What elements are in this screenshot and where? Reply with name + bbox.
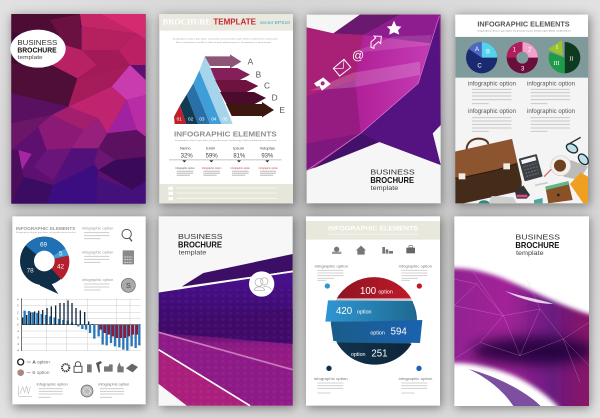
title: BUSINESS xyxy=(515,232,560,241)
text blocks: infographic options: infographic option xyxy=(468,82,516,88)
chart: segmented circle: option xyxy=(370,331,385,337)
dots xyxy=(325,283,422,371)
chart: pyramid arrows A-E: B xyxy=(256,69,262,79)
intro text: Nunc suspendisse convallis ut tellus at porta pellentesque leo. Suspendisse at tortor laoreet xyxy=(176,41,272,44)
stats row: 32% xyxy=(181,153,193,159)
icon: at sign: @ xyxy=(352,48,364,62)
chart: segmented circle: 100 xyxy=(360,286,376,297)
chart: pie ABC xyxy=(466,42,497,73)
panel: pyramid brochure: Suspendisse ultrices quis dolor, vel gravida mauris facilisis eget. Morbi condimentum malesuada xyxy=(175,139,277,142)
icon: globe xyxy=(81,385,93,397)
chart: bars: 3 xyxy=(17,304,19,308)
text blocks: lower options: infographic option xyxy=(37,383,68,387)
chart: pyramid arrows A-E: 02 xyxy=(188,117,194,122)
heading: INFOGRAPHIC ELEMENTS xyxy=(477,21,570,28)
text blocks: infographic options xyxy=(468,82,575,131)
chart: pyramid arrows A-E: 03 xyxy=(199,117,205,122)
text blocks: options with icons: infographic option xyxy=(82,250,113,254)
chart: bars: -1 xyxy=(17,329,20,333)
icon: magnifier xyxy=(122,229,132,241)
chart: segmented circle: option xyxy=(357,309,372,315)
heading: brochure template: vector EPS10 xyxy=(260,20,290,26)
title blob: business brochure: BUSINESS xyxy=(17,40,58,47)
title: business brochure: template xyxy=(371,186,399,192)
stats row: Voluptas xyxy=(260,146,275,151)
illustration: briefcase xyxy=(455,139,522,203)
icon row xyxy=(62,361,138,372)
panel: wave cover xyxy=(447,216,597,412)
chart: pie I II III xyxy=(548,40,580,73)
text blocks: infographic option xyxy=(399,264,432,268)
chart: donut speech bubble: 78 xyxy=(27,267,34,274)
chart: pyramid arrows A-E: 04 xyxy=(211,117,217,122)
icon: star xyxy=(387,21,401,35)
icon: people circle xyxy=(249,271,274,297)
chart: segmented circle: option xyxy=(351,352,366,358)
title: business brochure: BROCHURE xyxy=(370,175,414,185)
title: template xyxy=(179,251,207,257)
icon: chart thumbnail xyxy=(19,386,32,396)
title: BROCHURE xyxy=(178,240,222,250)
chart: segmented circle: 420 xyxy=(336,306,352,317)
panel: purple arrow cover xyxy=(307,15,441,203)
heading: brochure template: BROCHURE xyxy=(163,18,211,27)
panel: pyramid brochure xyxy=(159,14,293,203)
chart: donut speech bubble: 69 xyxy=(40,241,48,248)
stats row: 59% xyxy=(206,153,218,159)
chart: pyramid arrows A-E: A xyxy=(248,57,254,67)
panel: brochure cover polygon xyxy=(11,14,146,204)
panel: circle segment infographic xyxy=(306,216,440,406)
title blob: business brochure: template xyxy=(18,55,43,61)
intro text xyxy=(173,37,278,44)
text blocks: infographic options: infographic option xyxy=(527,82,575,88)
icon: calculator xyxy=(123,250,134,264)
stats row: 93% xyxy=(261,153,274,159)
chart: segmented circle: option xyxy=(378,289,393,295)
text blocks: infographic option xyxy=(399,377,432,381)
option columns: Infographic option xyxy=(202,167,222,170)
heading: Suspendisse ultrices quis dolor, vel gravida mauris facilisis xyxy=(16,231,76,234)
chart: bars: 4 xyxy=(17,297,19,301)
option columns xyxy=(175,167,279,175)
chart: pyramid arrows A-E: 05 xyxy=(222,117,228,122)
chart: pyramid arrows A-E: D xyxy=(272,92,278,102)
chart: segmented circle xyxy=(325,277,422,365)
chart: pie I II III: II xyxy=(569,57,573,63)
illustration: calculator xyxy=(519,154,543,181)
text blocks: infographic option xyxy=(314,377,348,381)
chart: pyramid arrows A-E: C xyxy=(264,81,270,91)
chart: bars: 2 xyxy=(17,310,19,314)
chart: bars: 0 xyxy=(17,323,19,327)
panel: donut and bar infographic xyxy=(12,216,146,404)
header band: INFOGRAPHIC ELEMENTS xyxy=(328,225,419,232)
header band xyxy=(306,221,440,240)
stats row xyxy=(169,146,282,162)
title: BROCHURE xyxy=(515,240,560,250)
heading xyxy=(16,226,76,234)
heading: brochure template xyxy=(163,17,290,27)
heading: infographic elements: INFOGRAPHIC ELEMENTS xyxy=(174,129,277,138)
icons row xyxy=(332,246,415,255)
footer band xyxy=(159,184,293,203)
title blob: business brochure xyxy=(10,30,66,68)
title xyxy=(178,232,223,257)
legend: A option xyxy=(32,359,50,364)
chart: pie ABC: C xyxy=(477,63,482,69)
text blocks: options with icons xyxy=(82,227,113,290)
chart: pie I II III: III xyxy=(553,61,559,67)
chart: donut 123: 1 xyxy=(513,48,517,54)
icon: coin: S xyxy=(126,281,131,290)
panel: pie charts and briefcase: Suspendisse ultrices quis dolor, vel gravida mauris facilisis eget. Morbi condimentum xyxy=(477,29,572,32)
chart: segmented circle: 594 xyxy=(391,326,407,337)
chart: pyramid arrows A-E: 01 xyxy=(177,117,182,122)
chart: donut 123: 3 xyxy=(521,67,525,73)
chart: pie I II III: I xyxy=(556,45,558,51)
illustration: orange folder xyxy=(570,173,588,203)
stats row: Ipsum xyxy=(233,146,245,151)
panel: pie charts and briefcase xyxy=(455,15,590,203)
chart: donut speech bubble xyxy=(20,237,69,294)
stats row: Nemo xyxy=(180,146,191,151)
chart: donut speech bubble: 42 xyxy=(57,264,65,271)
chart: bars: -3 xyxy=(17,342,20,346)
title: business brochure: BUSINESS xyxy=(370,168,415,177)
title: business brochure xyxy=(370,168,415,192)
text blocks: infographic option xyxy=(315,264,348,268)
title blob: business brochure: BROCHURE xyxy=(17,46,57,55)
stats row: Enim xyxy=(206,146,216,151)
chart: donut 123: 2 xyxy=(528,48,532,54)
title xyxy=(515,232,560,257)
icon: telephone xyxy=(314,77,331,91)
icon: coin xyxy=(121,278,135,292)
text blocks: options with icons: infographic option xyxy=(82,227,113,231)
chart: bars: 1 xyxy=(17,317,19,321)
stats row: 81% xyxy=(233,153,246,159)
text blocks xyxy=(314,264,432,393)
title: BUSINESS xyxy=(178,232,223,241)
chart: bars: -2 xyxy=(17,335,20,339)
chart: donut 123 xyxy=(507,42,538,73)
text blocks: options with icons: infographic option xyxy=(82,278,113,282)
icon: arrow xyxy=(371,36,381,48)
text blocks: infographic options: infographic option xyxy=(527,109,575,115)
chart: bars: -4 xyxy=(17,348,20,352)
intro text: Suspendisse ultrices quis dolor, vel gravida mauris facilisis eget. Morbi condimentum malesuada xyxy=(173,37,278,40)
option columns: Infographic option xyxy=(175,167,195,170)
title: template xyxy=(516,251,544,257)
option columns: Infographic option xyxy=(231,167,251,170)
legend: B option xyxy=(32,370,50,375)
legend xyxy=(17,359,50,376)
text blocks: lower options xyxy=(37,383,129,397)
heading: brochure template: TEMPLATE xyxy=(213,17,256,27)
illustration: coffee and papers xyxy=(551,156,588,180)
illustration: glasses xyxy=(565,137,590,166)
chart: bars xyxy=(17,297,141,352)
heading: INFOGRAPHIC ELEMENTS xyxy=(16,226,75,231)
chart: pie ABC: B xyxy=(486,50,490,56)
option columns: Infographic option xyxy=(259,167,279,170)
panel: purple stripes cover xyxy=(159,216,293,406)
chart: donut speech bubble: 5 xyxy=(59,251,63,258)
text blocks: infographic options: infographic option xyxy=(468,109,516,115)
chart: pie ABC: A xyxy=(475,47,479,53)
text blocks: lower options: infographic option xyxy=(98,383,129,387)
chart: pyramid arrows A-E xyxy=(174,54,285,124)
teal band xyxy=(455,37,588,78)
illustration: wallet xyxy=(545,181,573,203)
chart: segmented circle: 251 xyxy=(371,348,387,359)
chart: pyramid arrows A-E: E xyxy=(279,105,285,115)
icon: envelope xyxy=(333,59,351,76)
illustration: desk items xyxy=(478,169,551,203)
